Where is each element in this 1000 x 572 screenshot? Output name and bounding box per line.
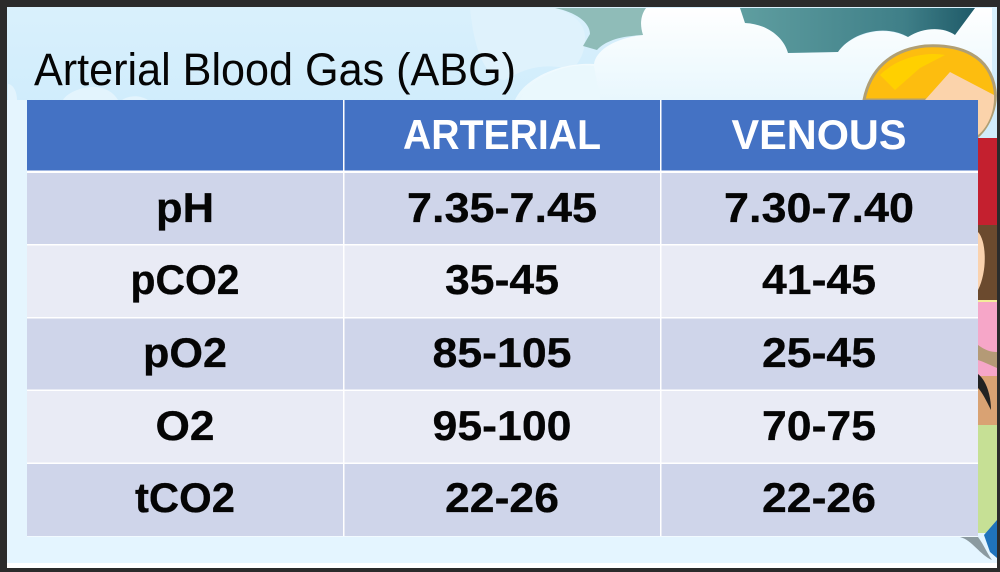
row: pH: 7.35-7.45: [407, 184, 597, 231]
title: Arterial Blood Gas (ABG): [34, 44, 516, 95]
illustration: blond child: [864, 46, 995, 136]
row: tCO2: tCO2: [135, 474, 235, 521]
row: pO2: [27, 318, 978, 390]
row: tCO2: 22-26: [762, 474, 876, 521]
row: pCO2: 35-45: [445, 256, 559, 303]
row: pO2: 85-105: [432, 329, 572, 376]
header row: VENOUS: [732, 111, 906, 158]
header row: [27, 100, 978, 170]
header row: ARTERIAL: [403, 111, 601, 158]
row: O2: [27, 391, 978, 462]
row: pO2: 25-45: [762, 329, 876, 376]
row: pH: 7.30-7.40: [724, 184, 914, 231]
row: O2: 70-75: [762, 402, 876, 449]
row: tCO2: 22-26: [445, 474, 559, 521]
background: white clouds: [515, 8, 992, 100]
table background grid lines: [27, 100, 978, 536]
row: pO2: pO2: [143, 329, 227, 376]
row: O2: O2: [156, 402, 214, 449]
background: teal sky patches: [555, 8, 975, 53]
background: pale cloud behind title: [470, 8, 585, 80]
row: pCO2: [27, 246, 978, 317]
row: O2: 95-100: [432, 402, 572, 449]
row: tCO2: [27, 464, 978, 536]
row: pCO2: pCO2: [130, 256, 240, 303]
illustration: children at right edge: [960, 138, 997, 560]
background: small clouds at left: [7, 65, 600, 540]
row: pH: pH: [156, 184, 214, 231]
row: pCO2: 41-45: [762, 256, 876, 303]
table: [27, 100, 978, 536]
row: pH: [27, 173, 978, 244]
